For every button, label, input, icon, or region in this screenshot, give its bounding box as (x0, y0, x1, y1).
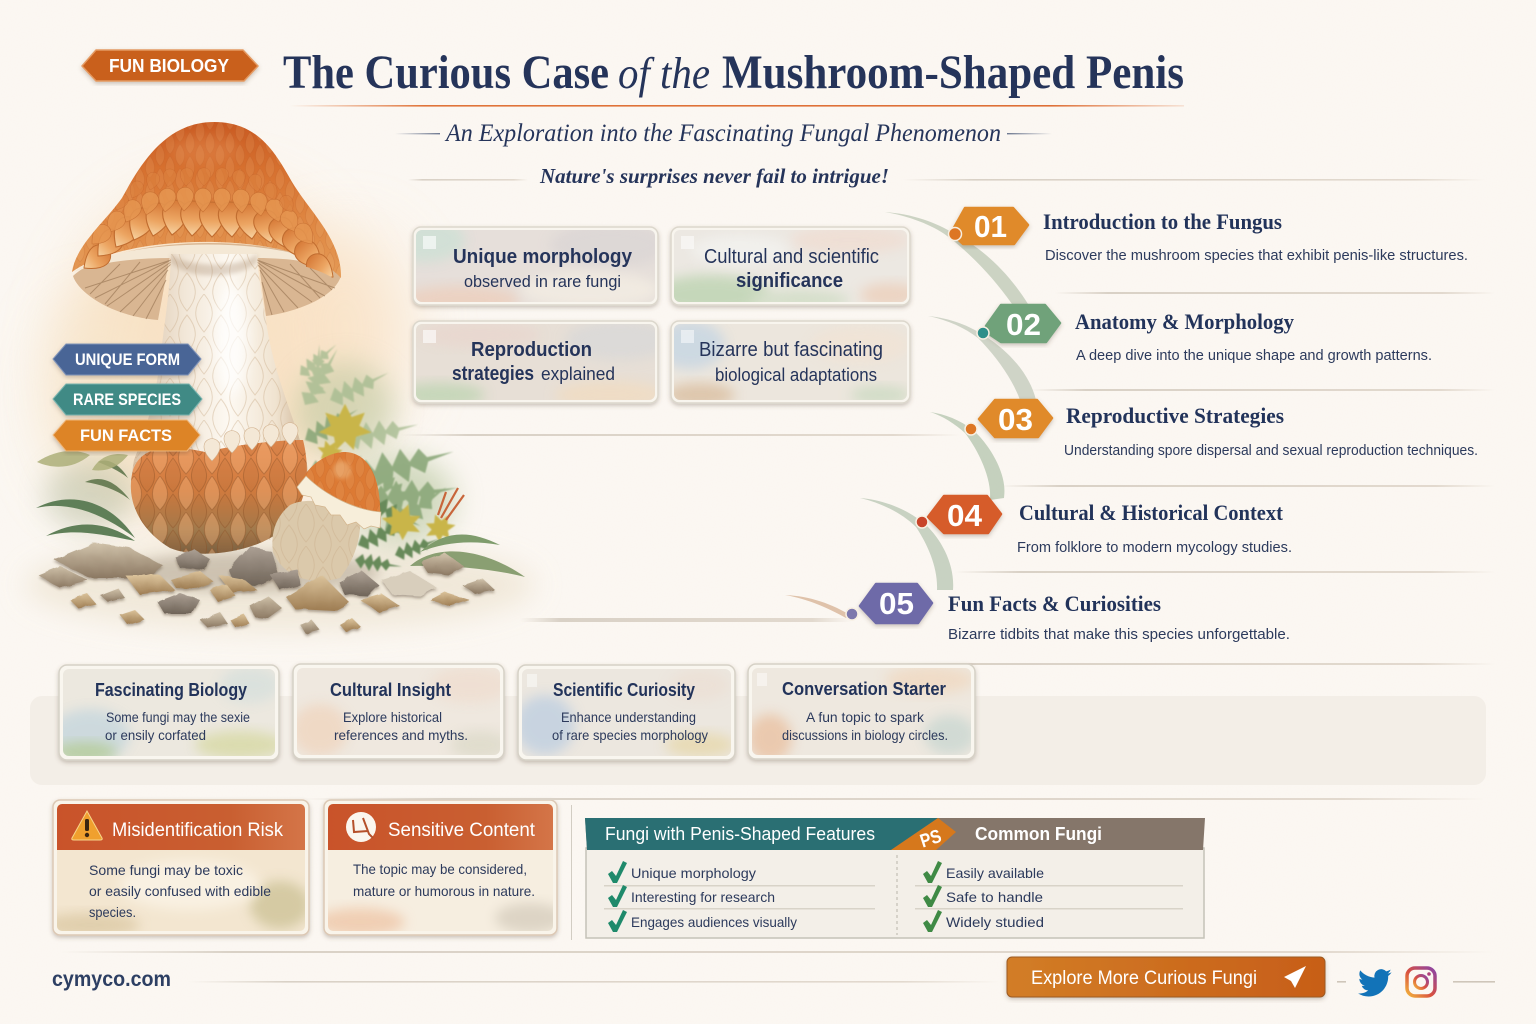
warning: misidentification risk: species. (89, 904, 136, 920)
title: Mushroom-Shaped Penis (722, 46, 1184, 99)
tag: unique form (53, 344, 201, 375)
illustration: mushroom (25, 122, 535, 634)
title (283, 46, 1184, 99)
benefit: scientific curiosity (515, 665, 735, 760)
card: unique morphology (410, 226, 662, 310)
benefit: fascinating biology: Some fungi may the sexie (106, 709, 250, 725)
warning: misidentification risk: Some fungi may be toxic (89, 862, 243, 878)
step 02 (977, 305, 1432, 364)
tag: rare species (53, 384, 202, 415)
card: cultural and scientific: Cultural and scientific (704, 246, 879, 268)
step 01 (948, 208, 1468, 264)
yellow leaves (313, 404, 459, 546)
step 04: 04 (947, 498, 983, 533)
card: unique morphology: Unique morphology (453, 246, 633, 268)
step 05: Fun Facts & Curiosities (948, 591, 1161, 616)
step 04 (916, 496, 1292, 556)
icon: paper plane (1284, 966, 1306, 988)
benefit: scientific curiosity: Enhance understanding (561, 709, 696, 725)
button: explore more: Explore More Curious Fungi (1031, 968, 1257, 989)
benefit: cultural insight: references and myths. (334, 727, 468, 743)
benefit: conversation starter: A fun topic to spark (806, 709, 925, 725)
benefit: cultural insight: Explore historical (343, 709, 442, 725)
left list: Unique morphology (631, 865, 756, 881)
step 02: Anatomy & Morphology (1075, 309, 1294, 334)
footer site name: cymyco.com (52, 968, 171, 991)
comparison header (585, 818, 1205, 853)
benefit: fascinating biology: Fascinating Biology (95, 680, 247, 700)
tag: unique form: UNIQUE FORM (75, 350, 180, 369)
icon: sensitive content (346, 812, 376, 842)
warning: misidentification risk: or easily confused with edible (89, 883, 271, 899)
step 03: 03 (998, 402, 1033, 437)
title: of the (618, 49, 710, 98)
foliage back (36, 338, 525, 577)
connector arcs (520, 212, 1036, 622)
stem base scales (131, 423, 307, 554)
comparison header: Common Fungi (975, 824, 1102, 844)
button: explore more (1007, 957, 1325, 997)
rocks (38, 543, 495, 634)
step 04: From folklore to modern mycology studies. (1017, 539, 1292, 556)
card: reproduction strategies: Reproduction (471, 339, 592, 361)
step 01: 01 (974, 209, 1007, 244)
warning: sensitive content: Sensitive Content (388, 820, 536, 841)
badge: fun biology: FUN BIOLOGY (109, 56, 229, 76)
step 01: Introduction to the Fungus (1043, 209, 1282, 234)
gills (73, 243, 341, 320)
icon: warning triangle (72, 811, 102, 840)
step 03 (965, 400, 1478, 459)
benefit: conversation starter: discussions in biology circles. (782, 727, 948, 743)
benefit: scientific curiosity: of rare species morphology (552, 727, 708, 743)
tag: fun facts (53, 420, 200, 451)
step 01: Discover the mushroom species that exhibit penis-like structures. (1045, 247, 1468, 264)
strap leaves (36, 461, 525, 577)
left list: Interesting for research (631, 889, 775, 905)
card: unique morphology: observed in rare fungi (464, 272, 621, 291)
benefits band (30, 696, 1486, 785)
comparison header: PS (918, 826, 944, 853)
warning: misidentification risk: Misidentification Risk (112, 820, 283, 841)
left list (608, 861, 797, 932)
warning: sensitive content: mature or humorous in nature. (353, 883, 535, 899)
watercolor wash (25, 190, 535, 631)
stem (132, 254, 308, 552)
tag: fun facts: FUN FACTS (80, 426, 172, 445)
benefit: cultural insight: Cultural Insight (330, 680, 451, 700)
right list: Widely studied (946, 914, 1044, 930)
card: cultural and scientific (668, 226, 914, 310)
right list: Easily available (946, 865, 1044, 881)
card: bizarre adaptations: biological adaptations (715, 365, 877, 385)
benefit: scientific curiosity: Scientific Curiosity (553, 680, 695, 700)
icon: instagram (1407, 968, 1435, 996)
comparison header: Fungi with Penis-Shaped Features (605, 824, 875, 844)
icon: twitter (1358, 969, 1392, 996)
warning: misidentification risk (40, 800, 310, 937)
step 04: Cultural & Historical Context (1019, 500, 1284, 525)
comparison panel (571, 805, 1205, 940)
card: reproduction strategies (410, 320, 662, 408)
card: bizarre adaptations (655, 321, 910, 407)
step 03: Understanding spore dispersal and sexual reproduction techniques. (1064, 442, 1478, 459)
step 02: A deep dive into the unique shape and growth patterns. (1076, 347, 1432, 364)
warning: sensitive content: The topic may be considered, (353, 861, 527, 877)
card: reproduction strategies: explained (541, 364, 615, 384)
tagline: Nature's surprises never fail to intrigue! (539, 164, 889, 188)
benefit: fascinating biology: or ensily corfated (105, 727, 206, 743)
step 02: 02 (1006, 307, 1041, 342)
left list: Engages audiences visually (631, 914, 797, 930)
tag: rare species: RARE SPECIES (73, 390, 181, 409)
step 05: Bizarre tidbits that make this species unforgettable. (948, 626, 1290, 643)
title: The Curious Case (283, 46, 609, 99)
card: reproduction strategies: strategies (452, 363, 534, 385)
warning: sensitive content (315, 800, 565, 936)
benefit: cultural insight (292, 664, 510, 759)
small mushroom (272, 452, 381, 581)
right list: Safe to handle (946, 889, 1043, 905)
badge: fun biology (82, 50, 258, 81)
step 05: 05 (879, 586, 914, 621)
cap (72, 122, 341, 286)
benefit: conversation starter (748, 664, 976, 762)
right list (923, 861, 1044, 932)
card: bizarre adaptations: Bizarre but fascinating (699, 339, 883, 361)
subtitle: An Exploration into the Fascinating Fungal Phenomenon (444, 120, 1001, 147)
benefit: conversation starter: Conversation Starter (782, 679, 946, 699)
benefit: fascinating biology (50, 665, 285, 762)
card: cultural and scientific: significance (736, 270, 843, 292)
step 03: Reproductive Strategies (1066, 403, 1284, 428)
step 05 (846, 584, 1290, 643)
